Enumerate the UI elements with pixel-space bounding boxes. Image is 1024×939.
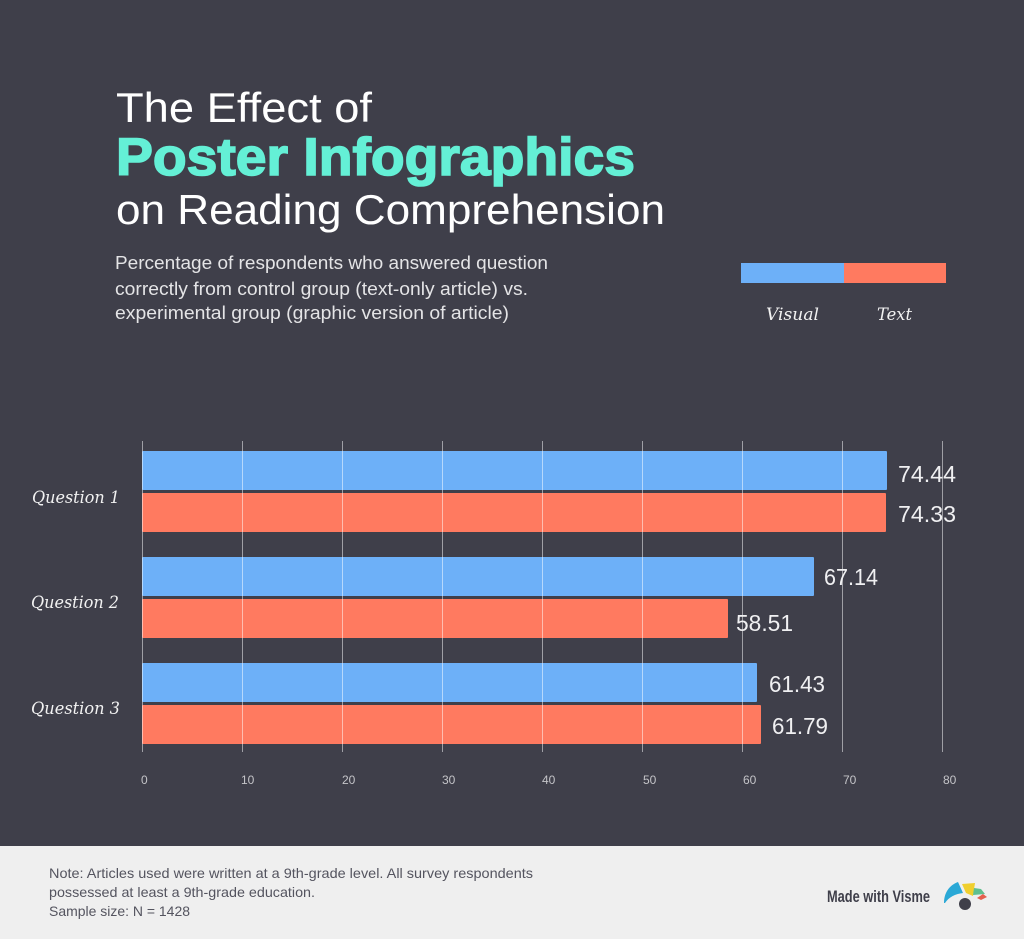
footnote	[49, 865, 533, 919]
title: Poster Infographics	[116, 128, 635, 187]
footnote: Note: Articles used were written at a 9th-grade level. All survey respondents	[49, 865, 533, 881]
bars: question 1	[142, 451, 887, 532]
value labels: 74.33	[898, 501, 956, 527]
legend: Text	[877, 305, 912, 325]
bars: question 2	[142, 557, 814, 638]
value labels: 58.51	[736, 610, 793, 636]
footnote: Sample size: N = 1428	[49, 903, 190, 919]
value labels: 67.14	[824, 564, 878, 590]
axis tick labels: 20	[342, 773, 356, 787]
title: The Effect of	[116, 84, 372, 131]
legend	[741, 263, 946, 325]
value labels: 61.43	[769, 671, 825, 697]
bars: question 3	[142, 663, 761, 744]
footer panel	[0, 846, 1024, 939]
branding text: Made with Visme	[827, 887, 930, 906]
axis tick labels	[141, 773, 957, 787]
subtitle text block: correctly from control group (text-only article) vs.	[115, 279, 528, 299]
category labels: Question 2	[31, 593, 119, 613]
footnote: possessed at least a 9th-grade education.	[49, 884, 315, 900]
category labels	[31, 488, 120, 719]
subtitle text block: Percentage of respondents who answered question	[115, 253, 548, 273]
axis tick labels: 60	[743, 773, 757, 787]
category labels: Question 1	[32, 488, 120, 508]
title: on Reading Comprehension	[116, 186, 665, 233]
axis tick labels: 30	[442, 773, 456, 787]
axis tick labels: 80	[943, 773, 957, 787]
icon: visme logo	[944, 882, 987, 910]
value labels: 61.79	[772, 713, 828, 739]
value labels: 74.44	[898, 461, 956, 487]
axis tick labels: 0	[141, 773, 148, 787]
category labels: Question 3	[31, 699, 120, 719]
axis tick labels: 40	[542, 773, 556, 787]
bar chart	[31, 441, 957, 787]
subtitle text block	[115, 253, 548, 323]
title	[116, 84, 665, 233]
value labels	[736, 461, 956, 739]
axis tick labels: 10	[241, 773, 255, 787]
legend: Visual	[766, 305, 819, 325]
subtitle text block: experimental group (graphic version of article)	[115, 303, 509, 323]
axis tick labels: 50	[643, 773, 657, 787]
axis tick labels: 70	[843, 773, 857, 787]
